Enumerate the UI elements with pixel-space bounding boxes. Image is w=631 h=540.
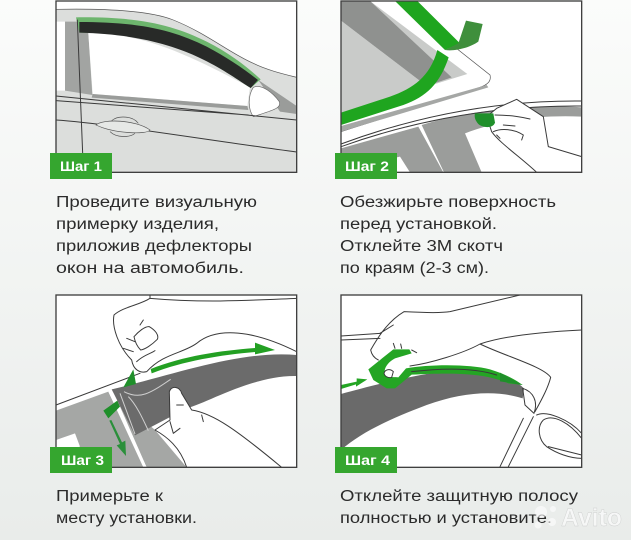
panel: step 1 illustration bbox=[56, 1, 297, 172]
panel: step 2 illustration bbox=[341, 1, 582, 172]
upper hand bbox=[114, 295, 297, 372]
panel: step 4 illustration bbox=[341, 295, 582, 467]
green tape on fingers bbox=[368, 349, 523, 388]
door handle bbox=[96, 121, 150, 133]
text: step 1: приложив дефлекторы bbox=[56, 238, 252, 255]
text: step 4: полностью и установите. bbox=[340, 510, 552, 527]
text: step 4: Отклейте защитную полосу bbox=[340, 488, 578, 505]
text: step 2: Обезжирьте поверхность bbox=[340, 194, 556, 211]
side windows bbox=[56, 22, 65, 91]
tape end bbox=[475, 113, 495, 127]
badge: step 1 bbox=[50, 153, 112, 179]
deflector bbox=[76, 17, 261, 88]
lower hand bbox=[155, 387, 282, 467]
text: step 1: Проведите визуальную bbox=[56, 194, 257, 211]
text: step 1 bbox=[56, 194, 257, 277]
mirror bbox=[249, 86, 280, 117]
watermark: Avito bbox=[561, 504, 622, 532]
hand bbox=[487, 99, 582, 172]
deflector bbox=[342, 374, 524, 447]
badge: step 1: Шаг 1 bbox=[60, 158, 102, 174]
text: step 1: окон на автомобиль. bbox=[56, 260, 244, 277]
text: step 2 bbox=[340, 194, 556, 277]
deflector bbox=[112, 354, 297, 435]
arrow down bbox=[109, 420, 126, 456]
text: step 3: Примерьте к bbox=[56, 488, 163, 505]
text: step 3: месту установки. bbox=[56, 510, 197, 527]
text: step 3 bbox=[56, 488, 197, 527]
hand bbox=[371, 295, 582, 412]
text: step 2: Отклейте 3М скотч bbox=[340, 238, 503, 255]
car body bbox=[56, 9, 297, 172]
car pillar bbox=[56, 392, 145, 467]
mirror glass bbox=[500, 388, 582, 467]
badge: step 4: Шаг 4 bbox=[345, 452, 390, 468]
badge: step 2 bbox=[335, 153, 397, 179]
door lines bbox=[56, 96, 297, 120]
tape upper bbox=[395, 1, 460, 50]
watermark bbox=[534, 504, 622, 532]
badge: step 2: Шаг 2 bbox=[345, 158, 389, 174]
panel: step 3 illustration bbox=[56, 295, 297, 467]
text: step 1: примерку изделия, bbox=[56, 216, 219, 233]
text: step 2: перед установкой. bbox=[340, 216, 497, 233]
lower car parts bbox=[341, 106, 582, 172]
badge: step 4 bbox=[335, 447, 397, 473]
text: step 4 bbox=[340, 488, 578, 527]
badge: step 3 bbox=[50, 447, 112, 473]
badge: step 3: Шаг 3 bbox=[61, 452, 104, 468]
tape lower bbox=[341, 50, 449, 125]
green arrow along edge bbox=[151, 343, 275, 373]
glass and seal bbox=[342, 50, 491, 132]
text: step 2: по краям (2-3 см). bbox=[340, 260, 489, 277]
